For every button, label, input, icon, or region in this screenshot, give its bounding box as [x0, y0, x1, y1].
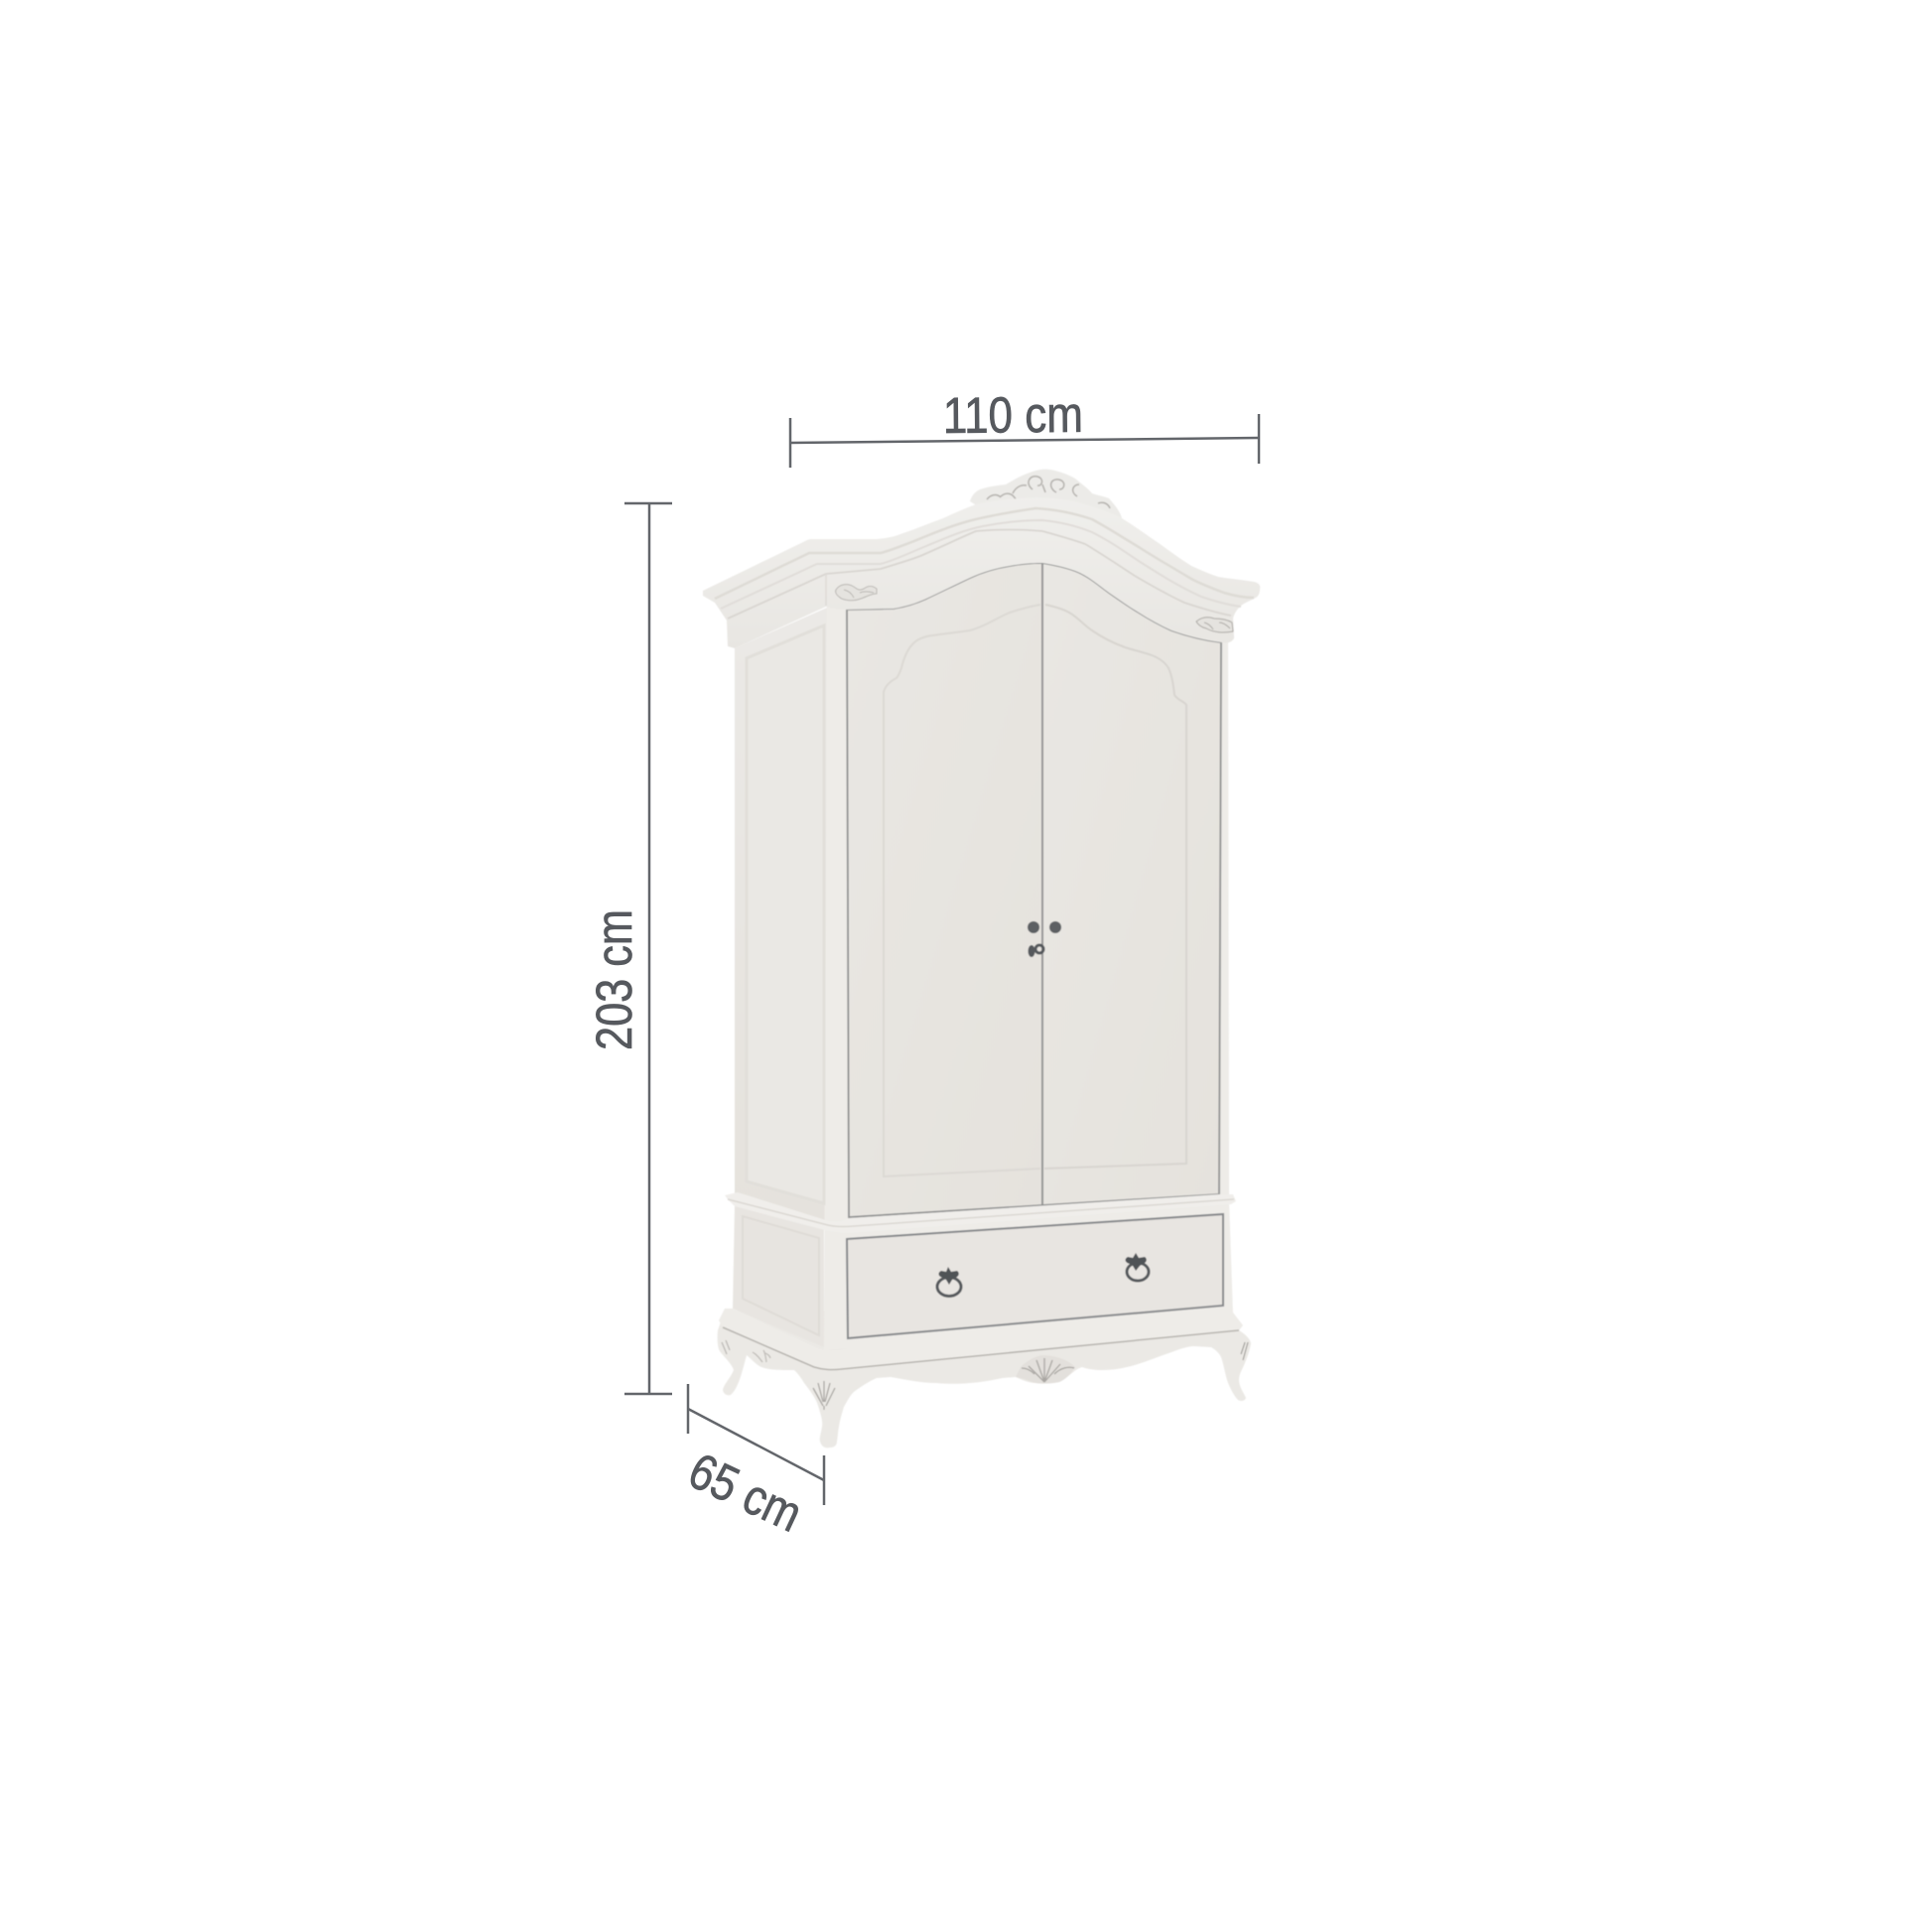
wardrobe: left side lower face — [733, 1205, 824, 1347]
depth: left tick — [687, 1384, 689, 1434]
wardrobe: cornice moulding lines — [715, 508, 1254, 619]
depth dimension — [680, 1384, 824, 1543]
wardrobe: mid ledge — [725, 1192, 1236, 1233]
wardrobe: plinth moulding line — [723, 1327, 1239, 1370]
wardrobe: back right leg carving — [1241, 1342, 1248, 1360]
width: left tick — [789, 418, 791, 468]
wardrobe: front leg carving — [813, 1381, 835, 1410]
wardrobe: right door knob — [1049, 921, 1061, 933]
wardrobe: plinth — [719, 1309, 1243, 1369]
wardrobe: key and escutcheon — [1029, 945, 1043, 957]
width dimension — [790, 386, 1259, 468]
wardrobe: front frame — [824, 596, 1233, 1350]
width: right tick — [1258, 414, 1260, 464]
wardrobe: ledge moulding line — [728, 1199, 1234, 1227]
wardrobe: right drawer handle — [1126, 1253, 1149, 1281]
wardrobe: left apron carving — [753, 1350, 770, 1362]
wardrobe: left cornice carving — [836, 585, 877, 601]
wardrobe: right cornice carving — [1196, 618, 1233, 632]
wardrobe: left side upper face — [735, 608, 827, 1223]
wardrobe: left door knob — [1028, 921, 1039, 933]
width: label: 110 cm — [943, 386, 1083, 444]
wardrobe: drawer — [847, 1214, 1223, 1338]
depth: measure line — [688, 1409, 824, 1480]
wardrobe: base silhouette with legs and apron — [718, 1311, 1251, 1448]
height: top tick — [624, 502, 672, 504]
wardrobe: cornice — [703, 497, 1260, 648]
height: bottom tick — [624, 1393, 672, 1395]
wardrobe: left door panel moulding — [884, 605, 1040, 1176]
wardrobe: left door — [847, 563, 1042, 1217]
wardrobe: right door — [1042, 563, 1221, 1205]
depth: right tick — [823, 1455, 825, 1505]
depth: label: 65 cm — [680, 1442, 810, 1543]
height: label: 203 cm — [586, 909, 642, 1050]
width: measure line — [790, 438, 1259, 443]
wardrobe: back left leg carving — [722, 1340, 730, 1354]
wardrobe: side upper panel — [747, 625, 824, 1203]
wardrobe: left drawer handle — [937, 1267, 961, 1297]
wardrobe: right door panel moulding — [1044, 605, 1186, 1169]
wardrobe: crest ornament — [970, 470, 1122, 518]
wardrobe illustration — [703, 470, 1260, 1448]
wardrobe: centre shell carving — [1016, 1355, 1075, 1384]
wardrobe: side lower panel — [743, 1216, 819, 1335]
height: measure line — [648, 503, 650, 1394]
